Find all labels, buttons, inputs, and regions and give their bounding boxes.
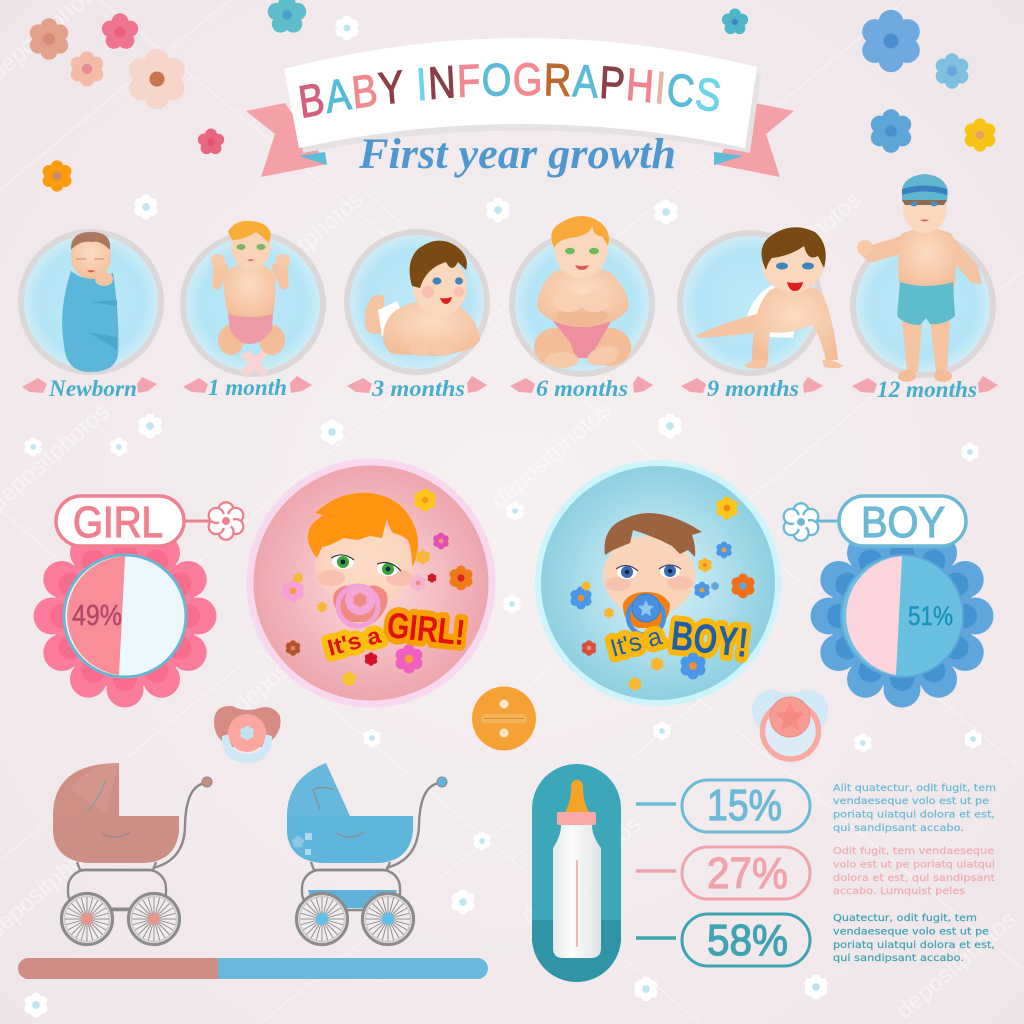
it's a boy text: [607, 612, 750, 666]
girl pill: GIRL: [73, 498, 163, 547]
petal flower boy: [810, 524, 994, 708]
baby 3 months: [365, 241, 480, 356]
baby 1 month: [211, 221, 290, 378]
stat 27%: [636, 847, 810, 899]
it's a girl text: It's a: [325, 622, 384, 661]
small white flowers: [24, 195, 982, 1017]
text block pink: volo est ut pe poriatq uiatqui: [833, 860, 995, 870]
icon: pacifier pink: [214, 706, 281, 763]
basket: [53, 816, 179, 863]
girl connector flower: [184, 502, 243, 540]
frame: [302, 783, 440, 910]
panel: it's a girl: [250, 462, 492, 704]
watermarks: depositphotos: [736, 186, 867, 305]
label: newborn: Newborn: [48, 376, 137, 401]
progress bar pink and blue: [18, 958, 488, 979]
text block pink: Odit fugit, tem vendaeseque: [833, 846, 994, 857]
pie girl 49%: [64, 555, 186, 677]
hood: [53, 763, 119, 816]
baby 12 months: [857, 174, 982, 382]
knob: [202, 777, 212, 787]
text block teal: [833, 913, 995, 964]
frame: [68, 783, 206, 910]
bottle panel: [532, 764, 621, 982]
stage: newborn: [21, 232, 161, 372]
text block blue: poriatq uiatqui dolora et est,: [833, 810, 995, 820]
stat 15%: [636, 780, 810, 832]
text block teal: vendaeseque volo est ut pe: [833, 926, 989, 938]
watermarks: depositphotos: [238, 186, 369, 305]
icon: orange button: [472, 686, 536, 750]
stage: 9 months: [680, 227, 844, 373]
stroller pink: [53, 763, 212, 944]
panel: boy statistic: [784, 496, 994, 708]
girl circle flowers: [282, 489, 473, 686]
icon: pacifier coral: [752, 690, 828, 759]
label: 9 months: 9 months: [707, 376, 799, 401]
stage: 12 months: [853, 174, 993, 382]
boy pill: BOY: [861, 498, 945, 547]
panel: girl statistic: [34, 496, 243, 708]
pie girl 49%: 49%: [72, 600, 122, 632]
text block blue: qui sandipsant accabo.: [833, 823, 964, 834]
label: newborn: [22, 376, 157, 401]
boy pacifier: [623, 592, 670, 635]
text block pink: [833, 846, 995, 897]
label: 9 months: [681, 376, 823, 401]
baby 6 months: [534, 216, 631, 369]
stage: 1 month: [183, 221, 323, 378]
label: 3 months: 3 months: [371, 376, 465, 401]
watermarks: depositphotos: [646, 581, 777, 700]
label: 6 months: 6 months: [536, 376, 628, 401]
tray: [308, 890, 397, 908]
watermarks: depositphotos: [516, 811, 647, 930]
stage: 3 months: [347, 232, 487, 372]
knob: [437, 777, 447, 787]
text block blue: [833, 783, 996, 834]
subtitle: First year growth: [358, 131, 676, 178]
panel: it's a boy: [538, 463, 778, 703]
boy face: [603, 513, 702, 616]
it's a girl text: GIRL!: [385, 604, 467, 653]
stage: 6 months: [512, 216, 652, 374]
baby newborn: [62, 232, 118, 372]
girl face: [308, 493, 418, 610]
stat 27%: 27%: [707, 849, 788, 898]
it's a boy text: It's a: [607, 622, 665, 663]
label: 1 month: 1 month: [208, 375, 287, 400]
petal flower girl: [34, 524, 216, 708]
label: 3 months: [347, 376, 487, 401]
it's a girl text: [325, 604, 467, 661]
title banner: [246, 38, 794, 177]
boy circle flowers: [570, 497, 755, 691]
decorative flowers top: [30, 0, 995, 192]
stat 58%: 58%: [707, 916, 788, 965]
it's a boy text: BOY!: [669, 612, 750, 666]
boy connector flower: [784, 503, 839, 541]
wheels: [62, 894, 180, 944]
pie boy 51%: 51%: [908, 601, 953, 631]
label: 12 months: [852, 376, 998, 402]
watermarks: depositphotos: [891, 906, 1022, 1024]
wheels: [296, 894, 414, 944]
text block teal: Quatectur, odit fugit, tem: [833, 913, 977, 924]
bottle: [553, 780, 601, 958]
pie boy 51%: [841, 555, 963, 677]
girl pacifier: [333, 585, 388, 626]
text block blue: vendaeseque volo est ut pe: [833, 796, 989, 807]
stat 58%: [636, 914, 810, 966]
text block teal: qui sandipsant accabo.: [833, 953, 964, 964]
hood: [287, 763, 350, 816]
watermarks: depositphotos: [228, 601, 359, 720]
title text: BABY INFOGRAPHICS: [299, 62, 720, 118]
text block blue: Alit quatectur, odit fugit, tem: [833, 783, 996, 794]
label: 6 months: [510, 376, 653, 401]
label: 1 month: [183, 375, 312, 400]
watermarks: depositphotos: [486, 396, 617, 515]
text block pink: dolora et est, qui sandipsant: [833, 873, 995, 884]
label: 12 months: 12 months: [877, 377, 977, 402]
stroller blue: [287, 763, 447, 944]
text block pink: accabo. Lumquist peles: [833, 886, 965, 897]
baby 9 months: [695, 227, 844, 369]
stat 15%: 15%: [707, 781, 782, 830]
basket: [287, 816, 413, 863]
text block teal: poriatq uiatqui dolora et est,: [833, 940, 995, 951]
